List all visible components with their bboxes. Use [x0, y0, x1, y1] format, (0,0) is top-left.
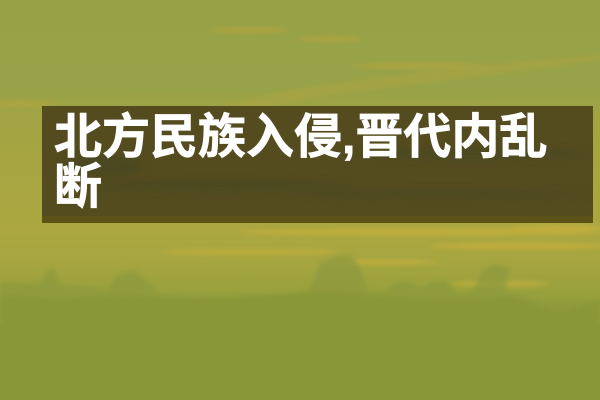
- title heading: 断: [54, 161, 102, 214]
- panel: dark translucent title banner: [42, 106, 593, 223]
- title heading: [54, 111, 547, 214]
- tree silhouettes: [0, 256, 600, 400]
- title heading: 北方民族入侵,晋代内乱: [54, 111, 547, 164]
